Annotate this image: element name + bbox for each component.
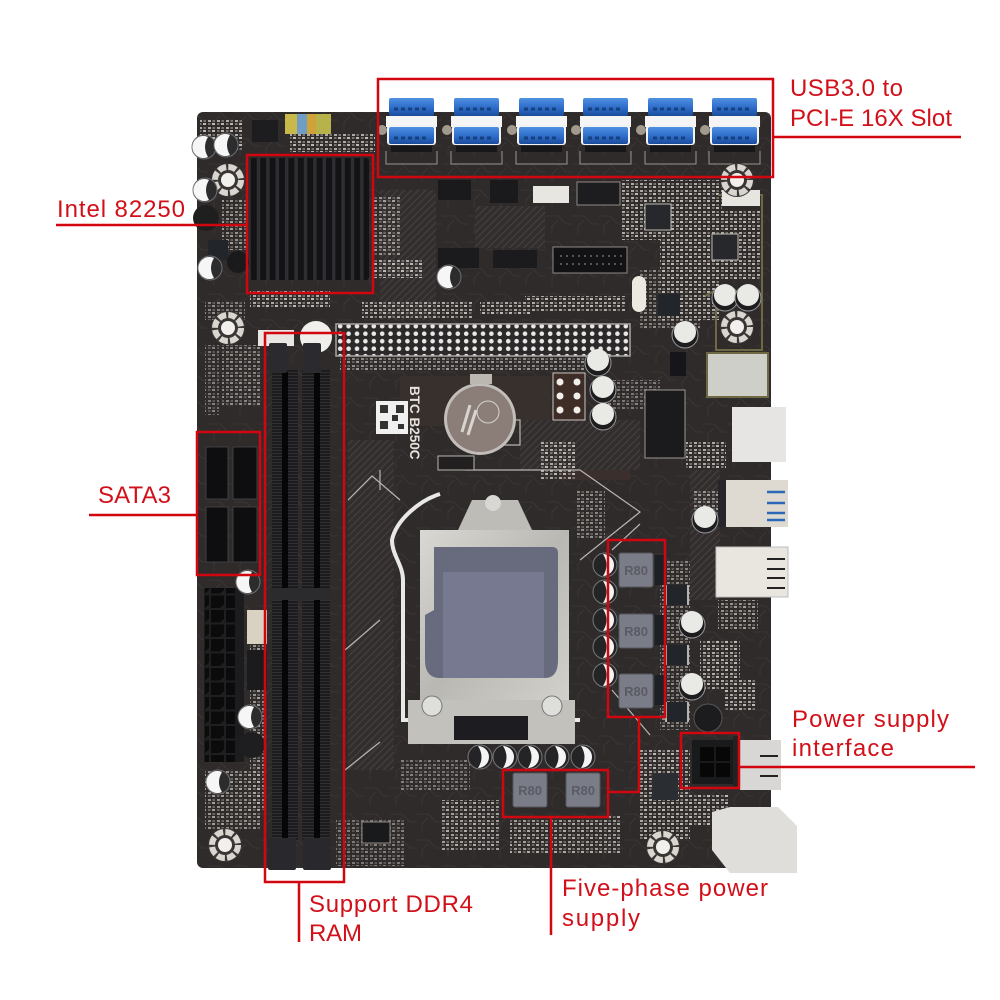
VRM chokes <box>513 553 653 807</box>
white cap near memory <box>258 321 332 353</box>
callout: USB3.0 to PCI-E 16X Slot <box>378 75 961 177</box>
callout: Power supply interface: interface <box>792 735 894 762</box>
top hinge <box>458 500 532 530</box>
USB rear port <box>716 547 788 597</box>
PCI-E slot <box>336 324 630 356</box>
panel: motherboard <box>192 98 797 873</box>
MOSFETs <box>655 555 689 722</box>
audio connector <box>705 190 768 397</box>
battery <box>444 374 516 455</box>
24-pin power connector <box>204 588 244 762</box>
copper and trace areas <box>348 190 720 770</box>
memory slots <box>268 343 331 870</box>
retention lever <box>392 494 580 720</box>
bottom bracket <box>408 700 575 744</box>
silkscreen model: BTC B250C <box>407 386 422 460</box>
callout: Support DDR4 RAM <box>265 333 473 947</box>
silkscreen outlines <box>345 420 650 770</box>
board base <box>197 112 771 868</box>
heatsink <box>249 158 369 280</box>
VGA/HDMI port <box>740 740 781 790</box>
callout: USB3.0 to PCI-E 16X Slot: USB3.0 to <box>790 75 903 102</box>
callout: Power supply interface: Power supply <box>792 706 949 733</box>
callout: Five-phase power supply <box>503 540 768 935</box>
callout: SATA3 <box>89 432 260 575</box>
six-pin brown connector <box>553 373 585 420</box>
DC block <box>712 807 797 873</box>
load plate <box>420 530 569 705</box>
callout: Five-phase power supply: Five-phase power <box>562 875 768 902</box>
socket body <box>425 547 558 678</box>
Ethernet port <box>732 407 786 462</box>
colour pin header <box>285 114 331 134</box>
SATA ports <box>206 447 257 562</box>
callout: Intel 82250: Intel 82250 <box>57 196 185 223</box>
rear I/O ports <box>712 407 797 873</box>
headers and chips <box>208 120 738 843</box>
capacitors <box>192 133 761 769</box>
USB 3.0 rear port <box>718 480 788 527</box>
socket screws <box>422 696 562 716</box>
ATX 12V connector <box>692 736 739 786</box>
SMD component clusters <box>200 120 760 866</box>
QR label <box>376 401 408 434</box>
USB 3.0 port bank <box>377 98 760 164</box>
callout: Support DDR4 RAM: Support DDR4 <box>309 891 473 918</box>
callout: Support DDR4 RAM: RAM <box>309 920 362 947</box>
small power parts beside memory <box>206 570 267 794</box>
callout: Power supply interface <box>681 706 975 788</box>
callout: SATA3: SATA3 <box>98 482 171 509</box>
callout: Intel 82250 <box>56 155 373 293</box>
callout: USB3.0 to PCI-E 16X Slot: PCI-E 16X Slot <box>790 105 952 132</box>
socket cover <box>443 572 544 678</box>
CPU socket <box>392 494 580 744</box>
callout: Five-phase power supply: supply <box>562 905 640 932</box>
mounting holes <box>208 163 754 864</box>
